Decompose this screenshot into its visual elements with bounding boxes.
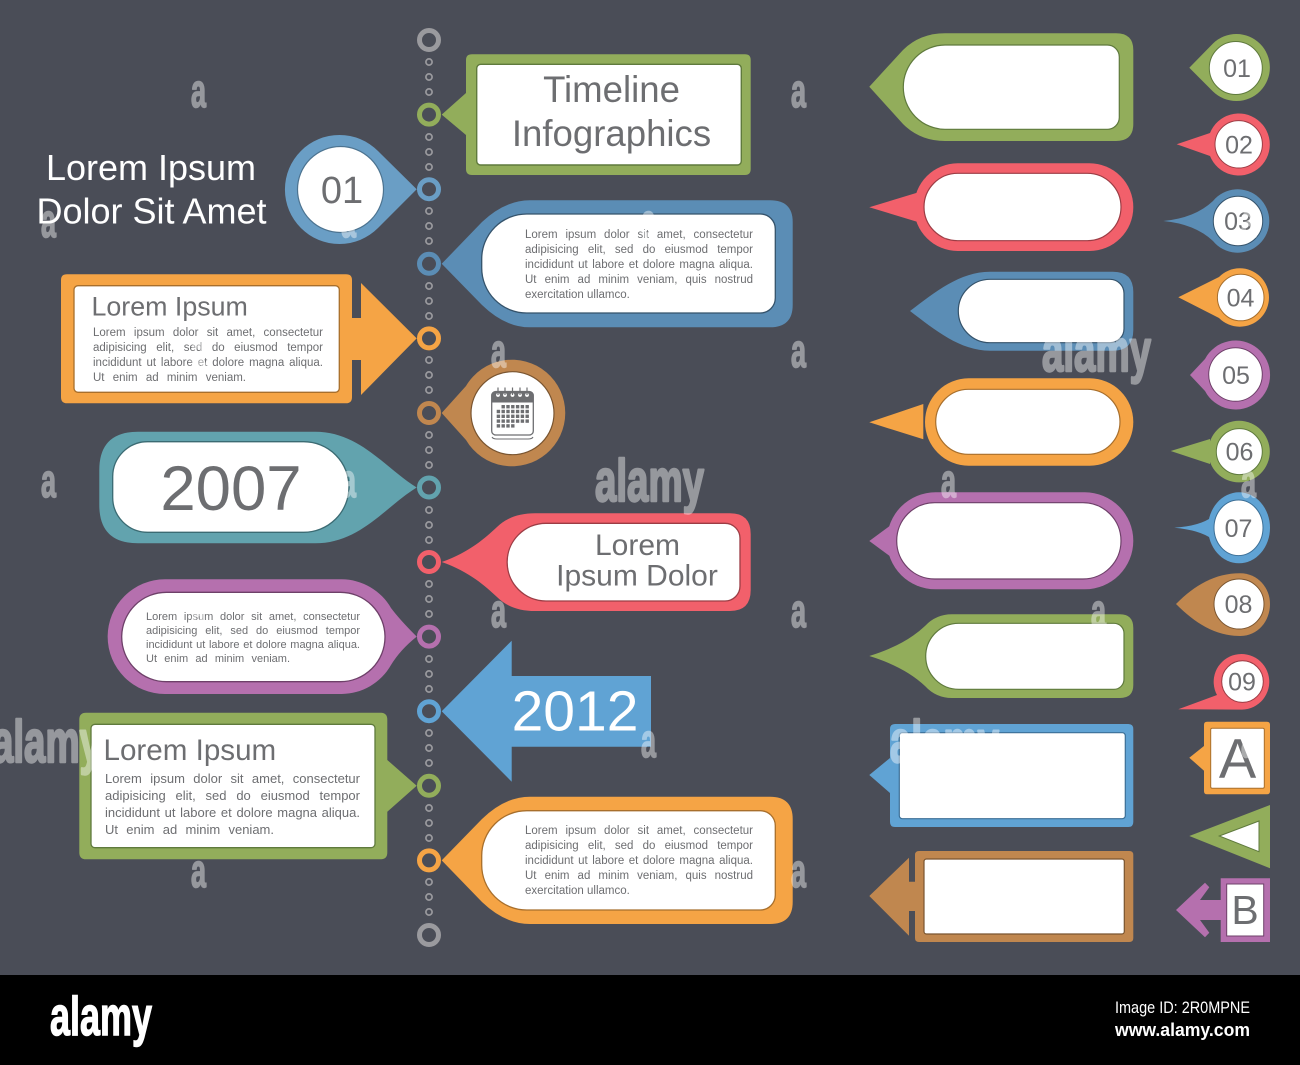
marker: letter A [1189,722,1270,794]
blank callout: blue [910,272,1133,351]
watermarks: alamy [595,448,704,514]
marker: small 08 [1176,573,1270,636]
panel: lorem ipsum dolor red callout: Lorem [595,529,680,562]
watermarks: a [41,194,56,247]
panel: orange arrow card [61,274,417,403]
watermarks: a [491,844,506,897]
watermarks: a [791,844,806,897]
timeline axis [420,30,438,944]
marker: small 08: 08 [1225,591,1252,619]
heading: lorem ipsum dolor sit amet [36,147,267,232]
footer bar: alamy [50,985,152,1047]
panel: 2007 year: 2007 [160,454,302,524]
watermarks: a [491,584,506,637]
marker: small 01 [1189,34,1270,101]
panel: orange text callout [442,797,793,924]
marker: triangle [1189,805,1270,868]
heading: lorem ipsum dolor sit amet: Dolor Sit Amet [36,190,267,232]
marker: small 06 [1171,421,1270,482]
blank callout: orange [869,378,1133,466]
blank callout: red [869,163,1133,251]
panel: green text card: adipisicing elit, sed do eiusmod tempor [105,788,360,803]
marker: 01 teardrop [285,135,417,244]
marker: small 05: 05 [1222,362,1250,390]
watermarks: a [941,454,956,507]
panel: blue text callout: incididunt ut labore et dolore magna aliqua. [525,259,753,271]
marker: small 04: 04 [1227,284,1254,312]
footer bar [0,975,1300,1065]
watermarks: a [791,324,806,377]
marker: small 07 [1174,492,1270,563]
panel: blue text callout [442,200,793,327]
panel: lorem ipsum dolor red callout: Ipsum Dolor [556,560,718,592]
marker: small 09 [1178,654,1269,710]
panel: purple text pill: adipisicing elit, sed do eiusmod tempor [146,625,360,637]
marker: letter B [1176,878,1270,942]
arrow: 2012 year: 2012 [512,680,638,744]
watermarks: alamy [890,709,999,775]
marker: small 07: 07 [1225,515,1252,543]
watermarks: a [791,584,806,637]
watermarks: a [791,64,806,117]
panel: title timeline infographics [442,54,751,175]
panel: lorem ipsum dolor red callout [442,513,751,611]
panel: green text card: Ut enim ad minim veniam. [105,822,274,837]
blank callout: brown arrow rectangle [869,851,1133,942]
footer bar: www.alamy.com [1114,1020,1250,1040]
watermarks: a [941,194,956,247]
blank callout: blue rectangle [869,724,1133,827]
marker: 01 teardrop: 01 [321,170,363,212]
marker: small 02: 02 [1225,132,1253,160]
watermarks: a [1241,194,1256,247]
panel: orange text callout: exercitation ullamco. [525,885,630,897]
heading: lorem ipsum dolor sit amet: Lorem Ipsum [46,147,256,188]
panel: orange text callout: incididunt ut labore et dolore magna aliqua. [525,855,753,867]
watermarks: a [191,584,206,637]
panel: orange text callout: Lorem ipsum dolor sit amet, consectetur [525,825,753,837]
panel: purple text pill [108,579,417,694]
watermarks: a [641,194,656,247]
panel: blue text callout: adipisicing elit, sed do eiusmod tempor [525,244,753,256]
panel: title timeline infographics: Timeline [543,69,680,110]
panel: blue text callout: Lorem ipsum dolor sit amet, consectetur [525,229,753,241]
marker: calendar teardrop [442,360,565,466]
watermarks: a [191,324,206,377]
watermarks [0,64,1256,897]
panel: purple text pill: Ut enim ad minim veniam. [146,653,290,665]
panel: green text card: Lorem ipsum dolor sit amet, consectetur [105,771,360,786]
panel: green text card: Lorem Ipsum [104,734,276,767]
watermarks: a [491,324,506,377]
watermarks: a [191,844,206,897]
watermarks: a [41,454,56,507]
blank callout: green tapered [869,614,1133,698]
arrow: 2012 year [442,641,651,782]
marker: small 03 [1163,189,1269,253]
panel: orange text callout: adipisicing elit, sed do eiusmod tempor [525,840,753,852]
panel: 2007 year [99,432,417,543]
watermarks: a [641,714,656,767]
marker: small 04 [1178,268,1269,327]
blank callout: green [869,33,1133,141]
marker: small 02 [1177,114,1270,175]
watermarks: a [1091,844,1106,897]
watermarks: a [1241,454,1256,507]
panel: orange text callout: Ut enim ad minim veniam, quis nostrud [525,870,753,882]
marker: letter B: B [1231,887,1259,933]
marker: small 09: 09 [1228,668,1256,696]
watermarks: a [341,454,356,507]
watermarks: a [491,64,506,117]
panel: orange arrow card: adipisicing elit, sed do eiusmod tempor [93,342,323,354]
marker: small 01: 01 [1223,55,1251,83]
marker: small 03: 03 [1224,208,1252,236]
panel: purple text pill: Lorem ipsum dolor sit amet, consectetur [146,611,360,623]
panel: title timeline infographics: Infographics [512,113,711,154]
panel: orange arrow card: incididunt ut labore et dolore magna aliqua. [93,357,323,369]
watermarks: a [1091,584,1106,637]
panel: blue text callout: exercitation ullamco. [525,289,630,301]
panel: green text card: incididunt ut labore et dolore magna aliqua. [105,805,360,820]
panel: blue text callout: Ut enim ad minim veniam, quis nostrud [525,274,753,286]
icon: calendar [492,388,533,439]
blank callout: purple [869,492,1133,589]
marker: small 06: 06 [1226,438,1253,466]
footer bar: Image ID: 2R0MPNE [1115,998,1250,1017]
watermarks: alamy [1042,318,1151,384]
panel: orange arrow card: Ut enim ad minim veniam. [93,372,246,384]
watermarks: a [1241,714,1256,767]
panel: green text card [79,713,417,859]
watermarks: a [341,714,356,767]
marker: letter A: A [1219,727,1257,790]
marker: small 05 [1190,341,1270,410]
watermarks: a [341,194,356,247]
panel: purple text pill: incididunt ut labore et dolore magna aliqua. [146,639,360,651]
watermarks: a [191,64,206,117]
panel: orange arrow card: Lorem ipsum dolor sit amet, consectetur [93,327,323,339]
panel: orange arrow card: Lorem Ipsum [92,292,248,322]
